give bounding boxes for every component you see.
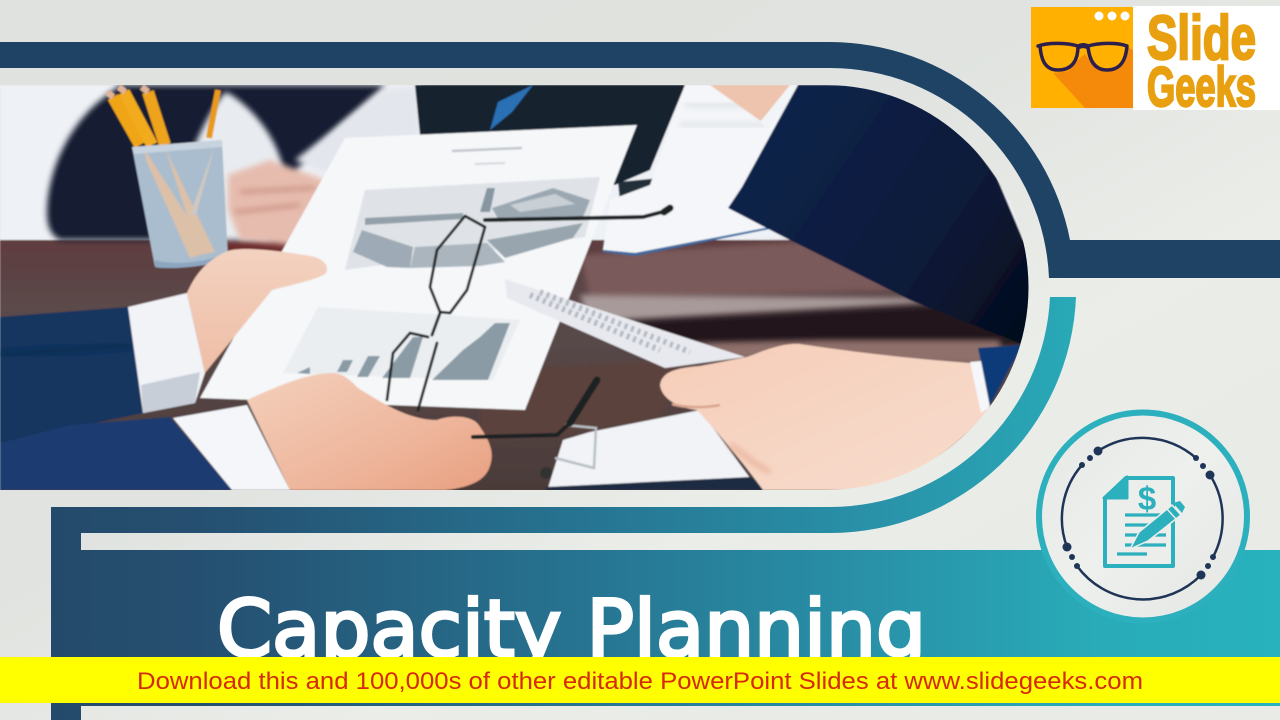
pen xyxy=(1130,501,1185,549)
logo xyxy=(1031,4,1280,118)
logo white panel xyxy=(1133,6,1280,110)
logo wordmark xyxy=(1147,4,1256,118)
top navy arc band xyxy=(0,42,1280,278)
photo: business meeting xyxy=(0,85,1040,495)
pencils xyxy=(108,87,218,145)
right table highlights xyxy=(480,240,1030,440)
right sleeve and cuff xyxy=(970,345,1022,413)
lower teal arc band and title panel xyxy=(51,297,1280,720)
front left sleeves xyxy=(0,307,232,490)
right person wrist and cuff xyxy=(710,85,798,122)
logo orange square xyxy=(1031,7,1133,108)
receipt xyxy=(505,279,745,368)
logo window dots xyxy=(1094,12,1130,20)
front lower hand and cuff xyxy=(173,373,492,490)
logo glasses xyxy=(1038,43,1127,70)
front right hand xyxy=(660,344,990,490)
pencil cup xyxy=(132,140,228,268)
front left hand holding sheet xyxy=(128,249,327,413)
papers on table xyxy=(602,86,770,257)
clipboard xyxy=(540,410,768,490)
icon badge: document with pen xyxy=(1039,412,1247,620)
logo long shadow xyxy=(1053,47,1133,108)
download banner xyxy=(0,657,1280,703)
laptop xyxy=(415,85,685,202)
download banner: Download this and 100,000s of other editable PowerPoint Slides at www.slidegeeks.com xyxy=(137,668,1143,695)
badge disc xyxy=(1039,412,1247,620)
front sheet with charts xyxy=(200,125,637,410)
right person jacket xyxy=(728,85,1040,345)
document xyxy=(1104,477,1173,566)
title: Capacity Planning xyxy=(217,585,926,675)
far right shirt sliver xyxy=(930,85,1010,178)
eyeglasses xyxy=(387,208,670,437)
document: $ xyxy=(1138,480,1156,517)
white shirt behind pencil cup xyxy=(195,92,282,240)
dotted navy ring xyxy=(1062,438,1223,599)
back paper xyxy=(295,85,420,180)
back hand xyxy=(228,160,325,245)
back person jacket xyxy=(47,85,385,240)
